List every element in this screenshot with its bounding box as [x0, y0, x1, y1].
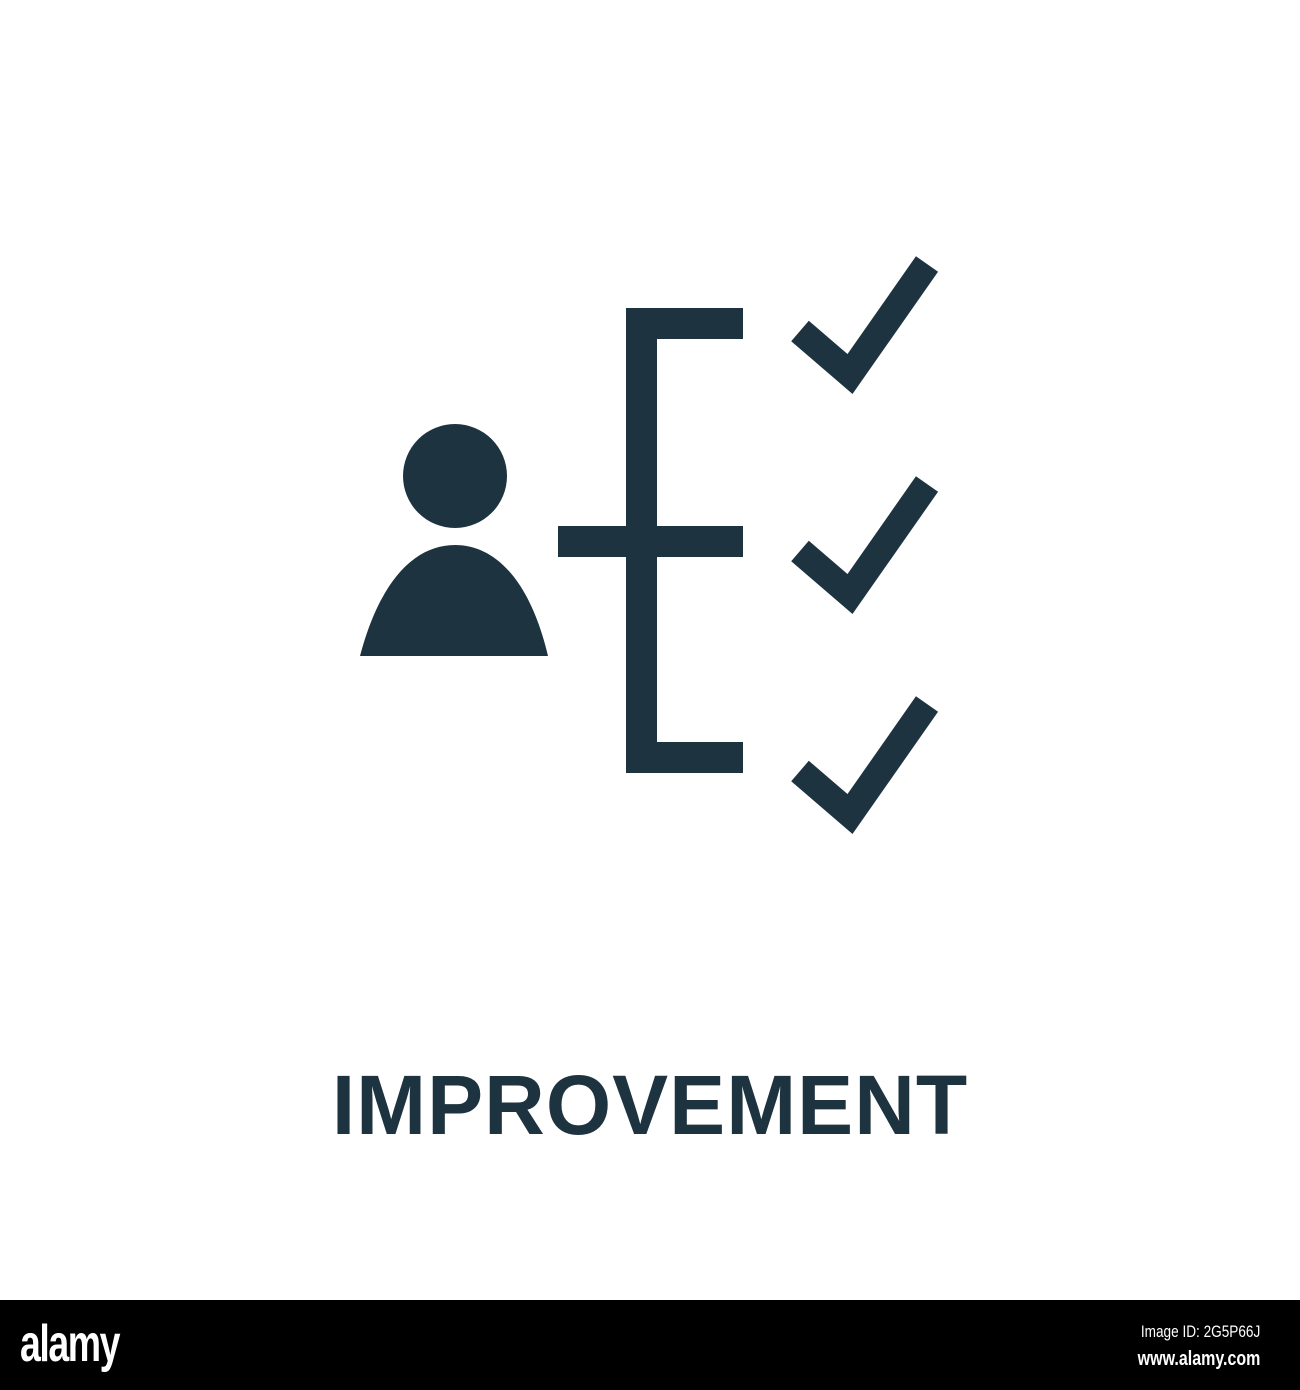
title: IMPROVEMENT: [332, 1058, 968, 1152]
footer bar: [0, 1300, 1300, 1390]
icon: checkmarks: [800, 264, 927, 814]
icon: person with checklist: [360, 256, 938, 834]
icon: person: [360, 424, 548, 656]
footer url: www.alamy.com: [1137, 1348, 1260, 1370]
footer logo: alamy: [20, 1315, 119, 1373]
footer image id: Image ID: 2G5P66J: [1141, 1322, 1260, 1341]
icon: bracket: [558, 308, 743, 773]
